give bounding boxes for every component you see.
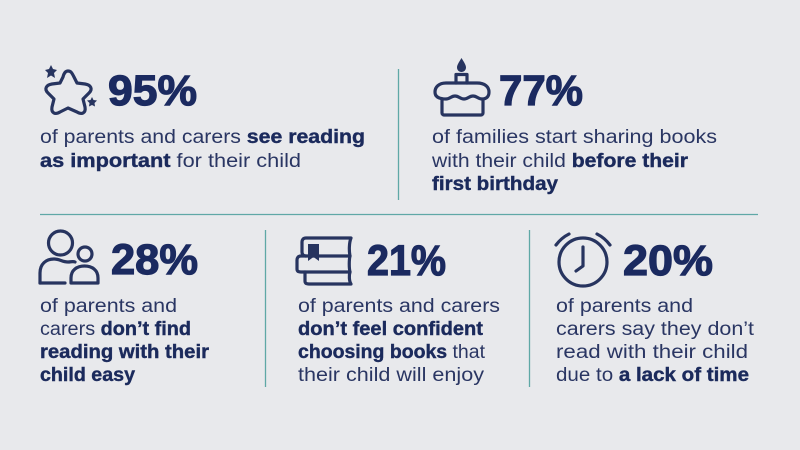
- icon: birthday cake: [435, 58, 489, 115]
- text: don't feel confident: their child will enjoy: [298, 365, 485, 386]
- icon: stack of books: [297, 238, 351, 284]
- text: see reading as important: [40, 127, 365, 172]
- stat: 28%: 28%: [111, 236, 198, 284]
- text: don't find reading easy: of parents and: [40, 296, 177, 317]
- text: lack of time: read with their child: [556, 342, 748, 363]
- text: don't feel confident: of parents and carers: [298, 296, 500, 317]
- text: before first birthday: first birthday: [432, 174, 558, 195]
- text: lack of time: [556, 296, 755, 386]
- text: before first birthday: [431, 127, 717, 195]
- panel: 20% lack of time: [556, 234, 755, 386]
- icon: stars: [45, 65, 97, 113]
- panel: 95% see reading as important: [40, 65, 365, 172]
- stat: 95%: 95%: [108, 67, 197, 115]
- text: before first birthday: with their child before their: [431, 151, 689, 172]
- text: see reading as important: of parents and carers see reading: [40, 127, 365, 148]
- panel: 77% start before first birthday: [431, 58, 717, 195]
- text: don't feel confident: [298, 296, 500, 386]
- icon: two people: [40, 231, 98, 283]
- panel: 21% don't feel confident: [297, 237, 500, 386]
- stat: 77%: 77%: [499, 67, 583, 115]
- text: don't feel confident: choosing books that: [298, 342, 486, 363]
- text: don't find reading easy: carers don’t find: [40, 319, 191, 340]
- text: lack of time: of parents and: [556, 296, 693, 317]
- text: lack of time: due to a lack of time: [556, 365, 749, 386]
- text: don't find reading easy: reading with their: [40, 342, 210, 363]
- stat: 21%: 21%: [367, 237, 446, 285]
- text: before first birthday: of families start sharing books: [432, 127, 717, 148]
- text: don't feel confident: don’t feel confident: [298, 319, 484, 340]
- stat: 20%: 20%: [623, 237, 713, 285]
- panel: 28% don't find reading easy: [40, 231, 210, 386]
- text: see reading as important: as important for their child: [40, 151, 301, 172]
- text: don't find reading easy: [40, 296, 210, 386]
- icon: alarm clock: [556, 234, 610, 286]
- text: don't find reading easy: child easy: [40, 365, 135, 386]
- text: lack of time: carers say they don’t: [556, 319, 755, 340]
